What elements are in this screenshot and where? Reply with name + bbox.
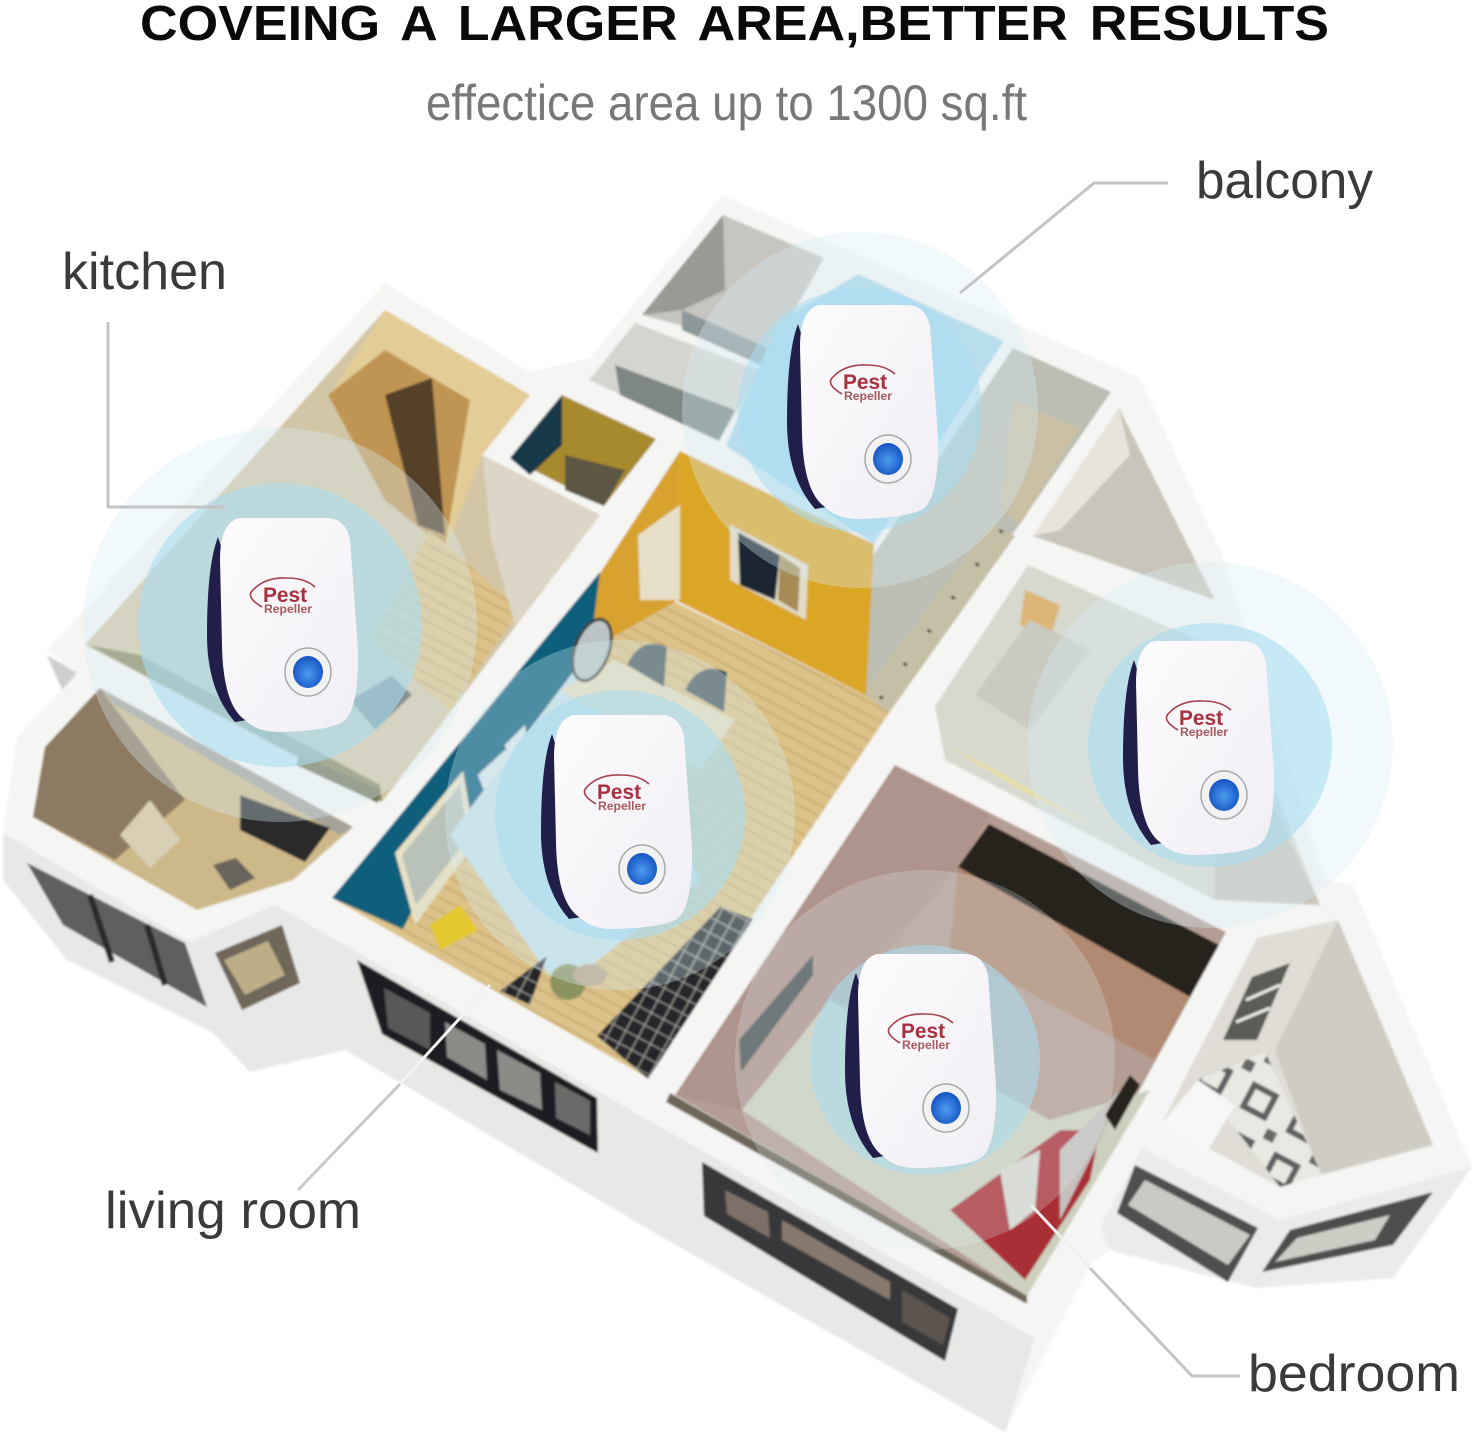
label: kitchen: kitchen	[62, 243, 227, 301]
corner room windows	[27, 863, 300, 1010]
device: kitchen: Pest	[263, 584, 307, 607]
signal halo: bedroom	[735, 870, 1115, 1250]
device: bedroom: Pest	[901, 1020, 945, 1043]
room: bedroom	[666, 765, 1226, 1304]
room: closet	[510, 395, 656, 506]
device: balcony: Repeller	[844, 391, 893, 403]
room: wall niche	[484, 458, 600, 625]
leader line: living room	[298, 985, 490, 1190]
device: right room	[1123, 641, 1274, 855]
room: small corner room	[33, 688, 353, 910]
device: right room: Repeller	[1180, 727, 1229, 739]
signal halo: right room	[1027, 562, 1393, 928]
wall picture	[730, 525, 808, 620]
label: living room: living room	[105, 1182, 361, 1240]
device: kitchen	[207, 518, 358, 732]
bathroom windows	[1117, 1165, 1433, 1282]
leader line: bedroom	[1031, 1205, 1240, 1376]
device: living room: Pest	[597, 781, 641, 804]
device: living room: Repeller	[598, 801, 647, 813]
room: upper rooms	[589, 215, 1111, 713]
room: bathroom	[1162, 920, 1433, 1187]
room: yellow dining wall	[590, 451, 874, 695]
device: balcony	[787, 305, 938, 519]
label: bedroom: bedroom	[1248, 1345, 1460, 1403]
room: kitchen	[85, 310, 600, 803]
living room windows	[357, 960, 598, 1153]
label: balcony: balcony	[1196, 152, 1373, 210]
front wall faces	[3, 655, 1472, 1432]
device: balcony: Pest	[843, 371, 887, 394]
signal halo: kitchen	[83, 428, 477, 822]
room: right utility rooms	[935, 408, 1320, 905]
leader line: balcony	[960, 183, 1168, 293]
device: right room: Pest	[1179, 707, 1223, 730]
device: living room	[541, 715, 692, 929]
device: bedroom	[845, 954, 996, 1168]
subtitle: effectice area up to 1300 sq.ft	[426, 75, 1027, 131]
leader line: kitchen	[108, 322, 225, 507]
room: living room	[332, 572, 889, 1079]
device: bedroom: Repeller	[902, 1040, 951, 1052]
device: kitchen: Repeller	[264, 604, 313, 616]
signal halo: balcony	[682, 232, 1038, 588]
bedroom window	[702, 1162, 958, 1361]
signal halo: living room	[445, 640, 795, 990]
